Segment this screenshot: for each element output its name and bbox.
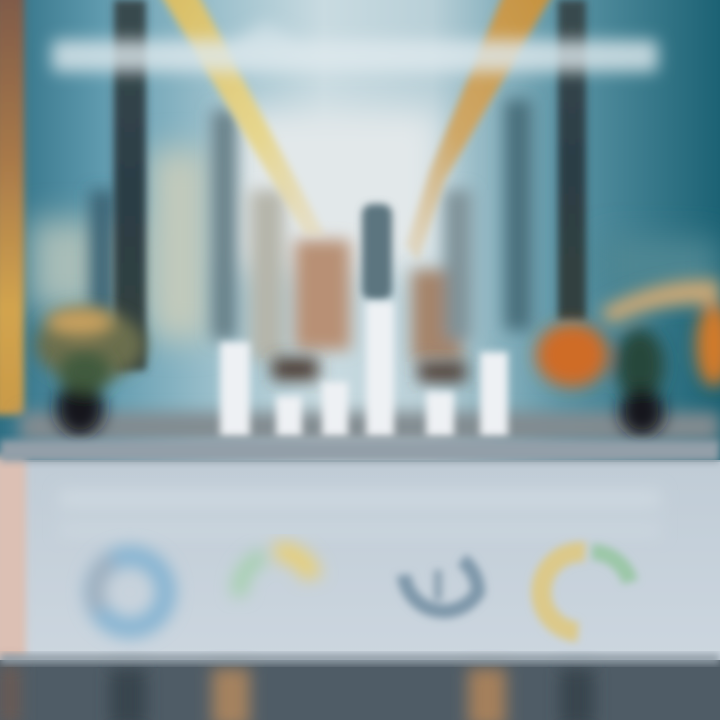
- panel left edge tint: [0, 455, 26, 660]
- donut chart 2: [240, 552, 312, 596]
- white bar chart: [220, 302, 508, 436]
- right orange and green planters: [536, 279, 720, 436]
- dark base shadows: [20, 310, 720, 442]
- city buildings: [90, 100, 531, 360]
- panel top edge: [0, 440, 720, 462]
- panel faint text rows: [60, 490, 660, 535]
- sky background: [0, 0, 720, 460]
- bottom strip reflections: [0, 665, 594, 720]
- left orange column: [0, 0, 24, 415]
- left black planter: [46, 308, 114, 436]
- dark tower right: [558, 0, 586, 320]
- lower panel: [0, 462, 720, 660]
- orange diagonal beam: [406, 0, 555, 262]
- donut chart 4: [541, 552, 630, 632]
- donut chart 1: [94, 556, 166, 628]
- panel bottom edge: [0, 654, 720, 664]
- bottom strip: [0, 660, 720, 720]
- donut chart 3: [404, 560, 478, 611]
- dark tower left: [114, 0, 146, 370]
- blurred white title band: [52, 22, 658, 72]
- ground haze: [30, 110, 720, 340]
- central tower: [362, 204, 392, 300]
- yellow diagonal beam: [158, 0, 325, 235]
